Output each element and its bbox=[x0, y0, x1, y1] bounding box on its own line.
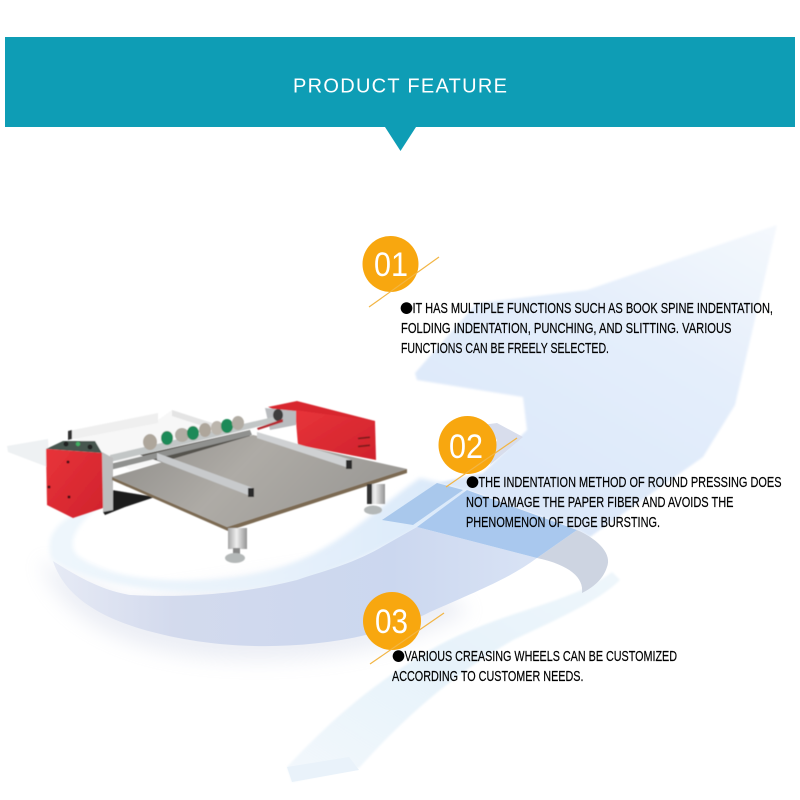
feature 02 bbox=[438, 416, 782, 531]
text block 03: ● bbox=[392, 646, 405, 665]
text block 03: ACCORDING TO CUSTOMER NEEDS. bbox=[392, 669, 584, 685]
lower tail ribbon bbox=[287, 572, 620, 782]
text block 01: ● bbox=[400, 298, 413, 317]
text block 02: PHENOMENON OF EDGE BURSTING. bbox=[466, 515, 660, 531]
steel table plate bbox=[112, 435, 407, 531]
number badge 01 bbox=[362, 236, 439, 307]
dark blue folds bbox=[382, 483, 463, 525]
text block 02: ● bbox=[466, 472, 479, 491]
text block 02 bbox=[466, 472, 782, 531]
right leg bbox=[364, 484, 385, 514]
roller shaft and creasing wheels bbox=[110, 409, 283, 470]
back paper tray bbox=[68, 410, 260, 470]
upper wing bbox=[415, 225, 777, 537]
background swoosh bbox=[40, 225, 777, 782]
feature 03 bbox=[363, 592, 677, 685]
text block 03 bbox=[392, 646, 677, 685]
heading: product feature: PRODUCT FEATURE bbox=[293, 76, 507, 98]
main lavender band bbox=[53, 527, 537, 646]
grey turn of the band bbox=[537, 530, 608, 593]
machine bbox=[7, 401, 407, 563]
number badge 02 bbox=[438, 416, 517, 487]
right red housing bbox=[265, 401, 376, 460]
soft shadow under band bbox=[40, 560, 470, 660]
header banner bbox=[5, 37, 795, 151]
fold near badge 02 bbox=[482, 423, 523, 465]
text block 01 bbox=[400, 298, 773, 357]
left red control box bbox=[46, 441, 103, 518]
pale ring around white ellipse bbox=[49, 478, 470, 592]
dark base under machine bbox=[103, 490, 155, 515]
guide rails bbox=[157, 432, 352, 497]
feature 01 bbox=[362, 236, 773, 357]
number badge 03 bbox=[363, 592, 444, 664]
number badge 01: 01 bbox=[374, 246, 408, 284]
number badge 02: 02 bbox=[449, 428, 483, 466]
text block 03: VARIOUS CREASING WHEELS CAN BE CUSTOMIZED bbox=[404, 649, 677, 665]
number badge 03: 03 bbox=[375, 603, 408, 641]
left white feed tray bbox=[7, 439, 50, 468]
silver side column bbox=[102, 452, 113, 512]
text block 01: FUNCTIONS CAN BE FREELY SELECTED. bbox=[401, 341, 609, 357]
front leg bbox=[225, 528, 247, 563]
